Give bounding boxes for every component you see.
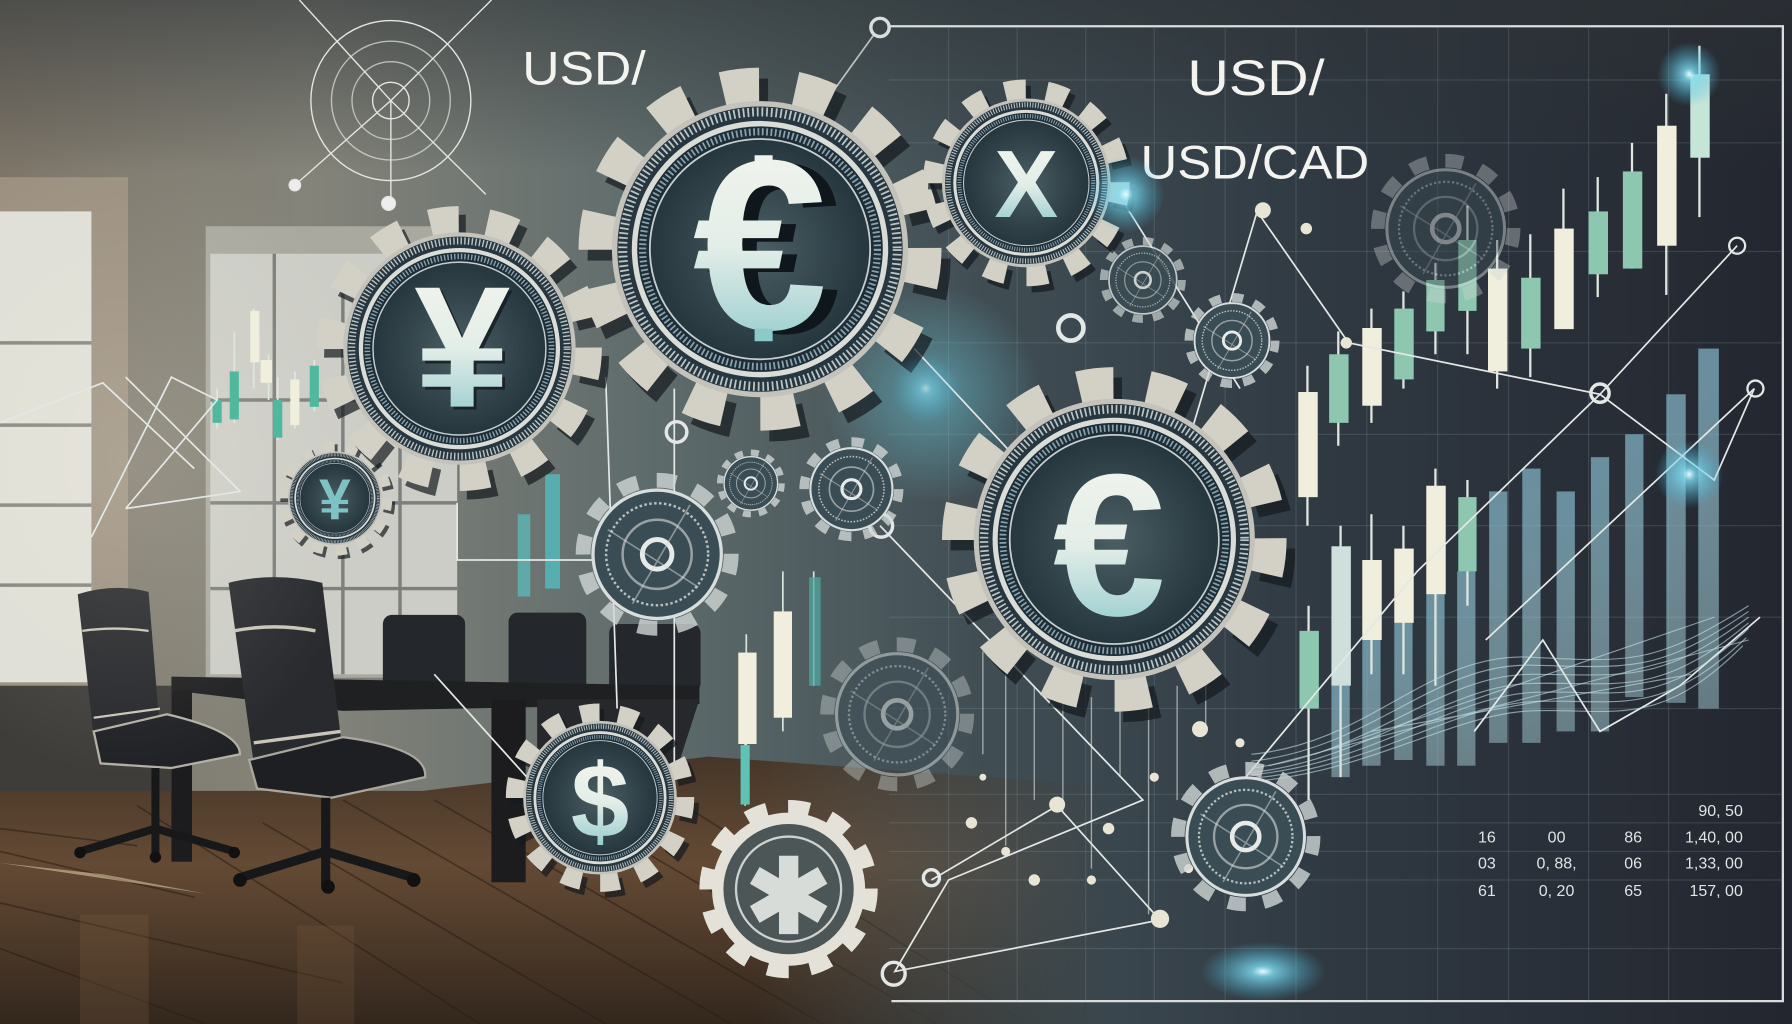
data table: 0, 88, — [1537, 856, 1577, 873]
label USD/ left: USD/ — [522, 43, 647, 95]
network lines and nodes — [0, 206, 1763, 985]
gear: X — [933, 89, 1125, 283]
dripping lines below gear — [983, 651, 1206, 914]
front left chair — [74, 588, 240, 863]
data table: 03 — [1478, 856, 1496, 873]
gear: upper right small — [1104, 241, 1182, 319]
gear: lower right — [1178, 769, 1314, 904]
gear: tiny centre — [720, 453, 782, 514]
data table: 06 — [1624, 856, 1642, 873]
gear: euro large: € — [693, 111, 827, 381]
back row chairs — [383, 613, 701, 695]
radial target diagram — [289, 0, 491, 210]
gear: faint centre lower — [827, 644, 967, 784]
gear: white lower: ✱ — [745, 840, 832, 955]
label USD/ right: USD/ — [1187, 49, 1325, 106]
front right chair — [229, 577, 425, 894]
gear: euro lower right — [958, 383, 1279, 706]
gear: tiny right — [804, 442, 899, 536]
blue glow behind gears — [823, 286, 1040, 503]
gear: faint upper right — [1378, 161, 1514, 296]
floor — [0, 757, 1143, 1024]
data table — [1478, 803, 1743, 900]
gear: small coin left: ¥ — [319, 468, 351, 532]
gear: dollar — [515, 712, 690, 889]
gear: white lower — [709, 809, 869, 969]
office room scene — [0, 177, 1143, 1024]
gear: yen: ¥ — [417, 253, 513, 447]
small mechanical gears — [283, 161, 1514, 904]
data table: 16 — [1478, 829, 1496, 846]
ceiling shading — [0, 0, 1792, 171]
data table: 157, 00 — [1689, 883, 1743, 900]
gear: small coin left — [283, 446, 390, 554]
data table: 90, 50 — [1698, 803, 1743, 820]
data table: 1,40, 00 — [1685, 829, 1743, 846]
gear: euro lower right: € — [1053, 432, 1165, 658]
left window — [0, 177, 171, 794]
wave mesh — [1251, 606, 1749, 782]
data table: 86 — [1624, 829, 1642, 846]
candlesticks mid — [518, 474, 821, 806]
panel frame — [800, 18, 1783, 1001]
candlesticks left — [213, 309, 319, 440]
scatter dots — [966, 202, 1352, 928]
right window — [206, 226, 457, 678]
window sunlight — [0, 137, 377, 777]
candlestick chart upper — [1298, 46, 1710, 800]
gear: center small — [583, 480, 731, 628]
label USD/CAD: USD/CAD — [1141, 136, 1369, 188]
chart grid — [889, 26, 1783, 1001]
data table: 00 — [1548, 829, 1566, 846]
gear: euro large — [596, 85, 933, 424]
gear: dollar: $ — [571, 743, 629, 860]
data table: 61 — [1478, 883, 1496, 900]
conference table — [171, 677, 699, 882]
data table: 0, 20 — [1539, 883, 1574, 900]
gear: euro large: € — [707, 114, 842, 384]
light flares — [891, 42, 1723, 1001]
data table: 1,33, 00 — [1685, 856, 1743, 873]
translucent volume bars — [1331, 349, 1719, 777]
gear: yen: ¥ — [414, 250, 510, 444]
data table: 65 — [1624, 883, 1642, 900]
gear: middle right small — [1189, 297, 1275, 384]
gear: X: X — [994, 131, 1058, 238]
gear: yen — [330, 220, 595, 486]
